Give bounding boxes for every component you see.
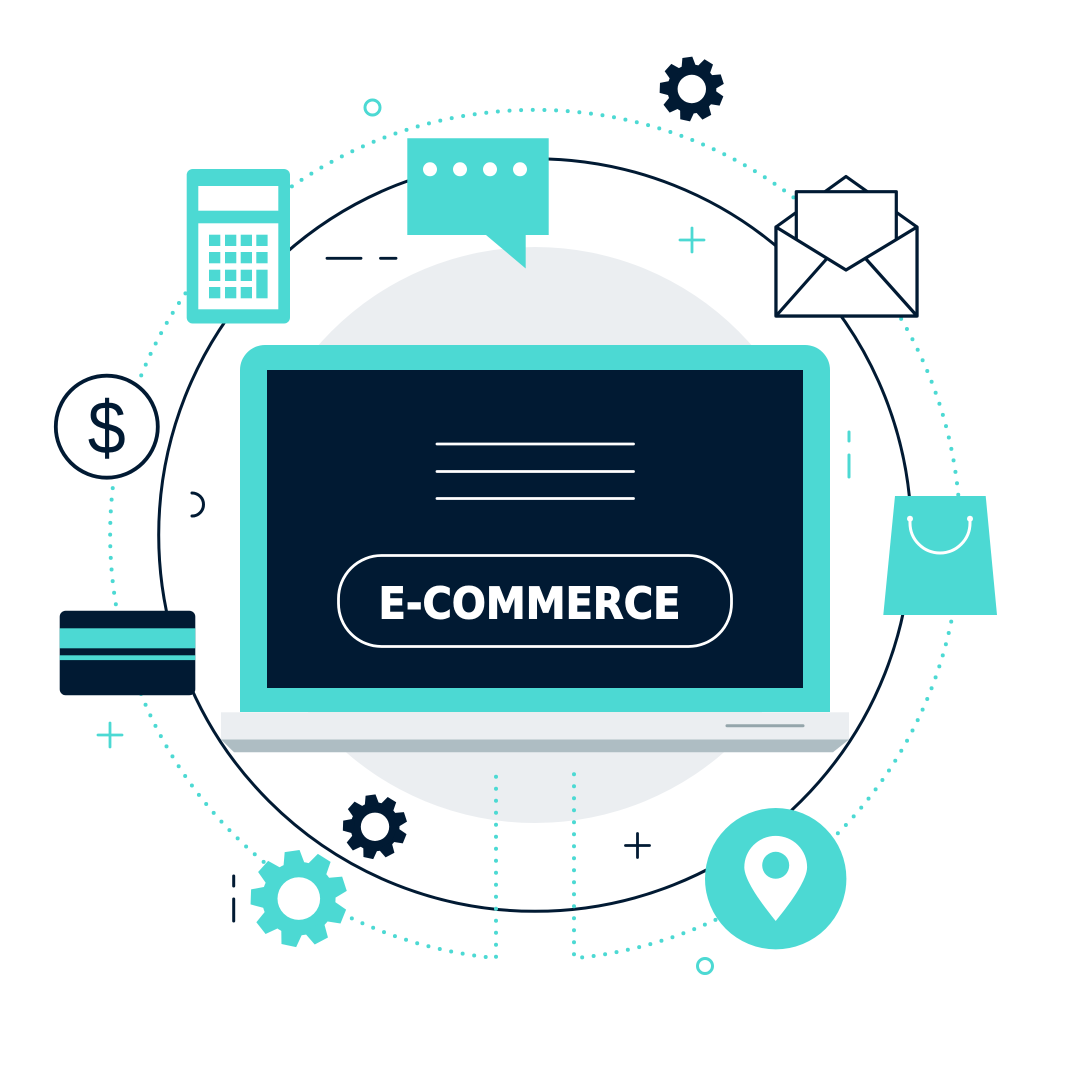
icon: teal gear [250,850,348,948]
icon: navy gear top [660,56,725,122]
navy vertical dashes [232,876,235,921]
navy plus bottom [626,834,650,858]
laptop [221,345,849,752]
icon: shopping bag [883,496,997,615]
navy dashes [327,257,396,260]
teal plus left [98,723,122,747]
laptop screen [267,370,803,688]
laptop base [221,712,849,740]
outer dotted ring [110,110,960,957]
teal plus top right [680,228,704,252]
teal vertical dashes [848,432,850,477]
main navy ring [159,159,911,911]
icon: calculator [187,169,290,324]
icon: dollar coin: $ [88,386,126,470]
icon: speech bubble [407,138,549,268]
icon: credit card [60,611,195,695]
e-commerce pill outline [338,556,732,646]
laptop base underside [221,740,849,752]
navy arc mark [192,493,204,516]
small teal ring bottom [698,958,712,974]
screen text lines [437,444,634,498]
icon: location pin [705,808,846,949]
icon: envelope [776,176,917,316]
small teal ring top [365,100,380,115]
laptop trackpad slot [727,724,803,727]
icon: dollar coin [56,376,158,478]
vertical dotted connectors [496,774,574,957]
e-commerce label: E-COMMERCE [378,580,680,630]
laptop lid [240,345,830,712]
icon: navy gear bottom [343,794,408,860]
background grey circle [247,247,823,823]
